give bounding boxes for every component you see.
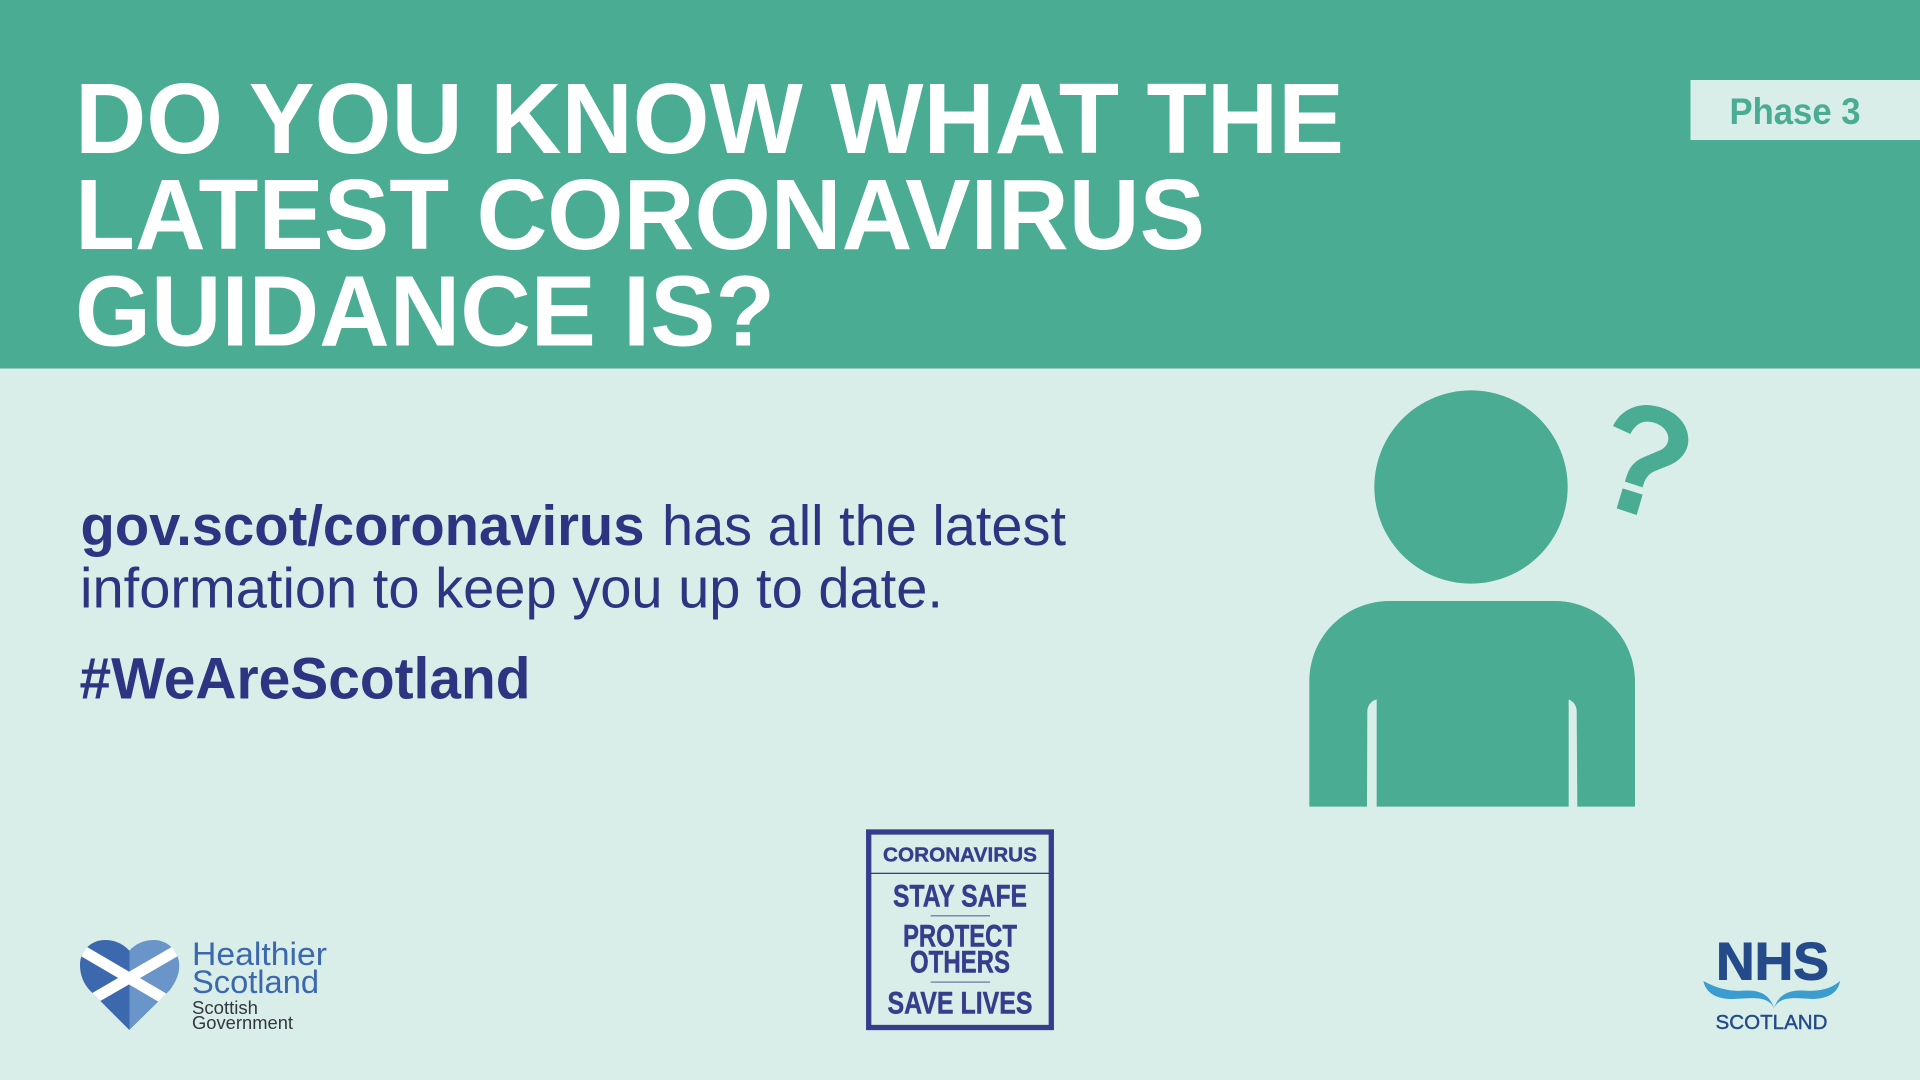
- slogan box: OTHERS: [910, 944, 1010, 980]
- slogan box: STAY SAFE: [893, 878, 1027, 914]
- icon: swoosh: [1703, 981, 1840, 1008]
- slogan box: PROTECT: [903, 918, 1017, 954]
- phase badge: [1690, 80, 1920, 140]
- logo wordmark: Scottish: [192, 998, 258, 1018]
- icon: body: [1309, 601, 1635, 807]
- slogan box: SAVE LIVES: [888, 984, 1032, 1020]
- phase badge: Phase 3: [1730, 91, 1860, 132]
- title: GUIDANCE IS?: [75, 256, 775, 368]
- logo wordmark: Scotland: [192, 964, 319, 1000]
- header banner: [0, 0, 1920, 368]
- title: LATEST CORONAVIRUS: [75, 159, 1205, 271]
- title: DO YOU KNOW WHAT THE: [75, 63, 1344, 175]
- body text: [80, 494, 1066, 620]
- logo: NHS Scotland: [1703, 932, 1840, 1034]
- logo: NHS Scotland: NHS: [1716, 932, 1829, 991]
- logo wordmark: Government: [192, 1013, 293, 1033]
- icon: head: [1374, 390, 1568, 584]
- logo: Healthier Scotland: [80, 940, 326, 1030]
- logo wordmark: [192, 936, 327, 1033]
- title: [75, 63, 1344, 368]
- logo wordmark: Healthier: [192, 936, 327, 972]
- hashtag: #WeAreScotland: [80, 646, 530, 711]
- icon: person with question mark: [1309, 390, 1688, 807]
- icon: question mark: [1613, 405, 1688, 515]
- logo: NHS Scotland: SCOTLAND: [1716, 1012, 1828, 1034]
- icon: saltire heart: [80, 940, 180, 1030]
- slogan box: CORONAVIRUS: [883, 844, 1037, 867]
- body text: gov.scot/coronavirus: [80, 494, 644, 558]
- slogan box: [869, 832, 1051, 1028]
- body text: has all the latest: [662, 494, 1066, 558]
- body text: information to keep you up to date.: [80, 556, 943, 620]
